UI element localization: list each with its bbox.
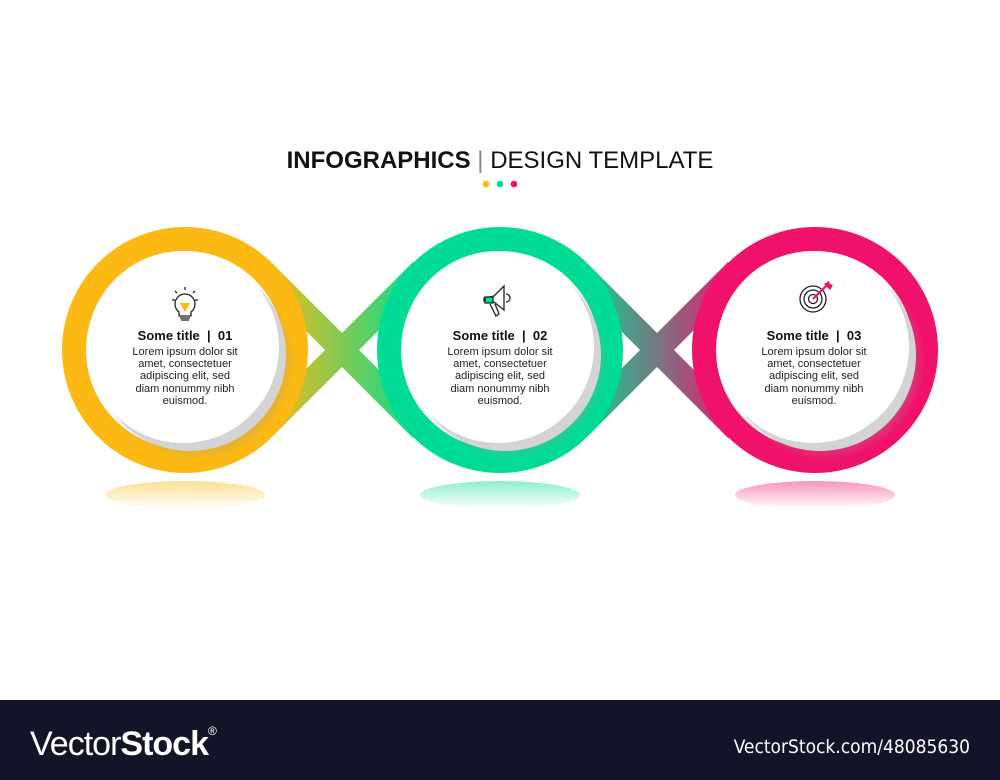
text block 2: amet, consectetuer bbox=[453, 358, 547, 370]
text block 3: Lorem ipsum dolor sit bbox=[761, 346, 867, 358]
text block 2: euismod. bbox=[478, 395, 522, 407]
text block 2: diam nonummy nibh bbox=[450, 383, 550, 395]
text block 3: euismod. bbox=[792, 395, 836, 407]
text block 2: adipiscing elit, sed bbox=[455, 370, 545, 382]
text block 1 bbox=[132, 328, 238, 407]
text block 3: amet, consectetuer bbox=[767, 358, 861, 370]
text block 1: amet, consectetuer bbox=[138, 358, 232, 370]
text block 2: Lorem ipsum dolor sit bbox=[447, 346, 553, 358]
footer logo: VectorStock bbox=[30, 725, 208, 763]
connector bands bbox=[264, 270, 736, 430]
text block 3: Some title | 03 bbox=[767, 328, 861, 343]
text block 2: Some title | 02 bbox=[453, 328, 547, 343]
footer bar bbox=[0, 700, 1000, 780]
text block 3: diam nonummy nibh bbox=[764, 383, 864, 395]
ring 3 bbox=[704, 239, 926, 461]
text block 1: adipiscing elit, sed bbox=[140, 370, 230, 382]
reflections bbox=[105, 481, 895, 509]
text block 3 bbox=[761, 328, 867, 407]
title dots bbox=[483, 181, 517, 187]
footer logo: ® bbox=[208, 724, 217, 738]
icon: megaphone bbox=[484, 286, 510, 316]
title: INFOGRAPHICS | DESIGN TEMPLATE bbox=[287, 147, 713, 174]
white discs bbox=[87, 251, 909, 443]
text block 2 bbox=[447, 328, 553, 407]
footer url: VectorStock.com/48085630 bbox=[734, 736, 970, 758]
disc shadows bbox=[94, 259, 925, 460]
icon: target bbox=[800, 281, 833, 312]
ring 2 bbox=[389, 239, 611, 461]
ring 1 bbox=[74, 239, 296, 461]
text block 1: euismod. bbox=[163, 395, 207, 407]
text block 1: Some title | 01 bbox=[138, 328, 232, 343]
text block 3: adipiscing elit, sed bbox=[769, 370, 859, 382]
icon: light bulb bbox=[172, 287, 198, 320]
text block 1: diam nonummy nibh bbox=[135, 383, 235, 395]
text block 1: Lorem ipsum dolor sit bbox=[132, 346, 238, 358]
